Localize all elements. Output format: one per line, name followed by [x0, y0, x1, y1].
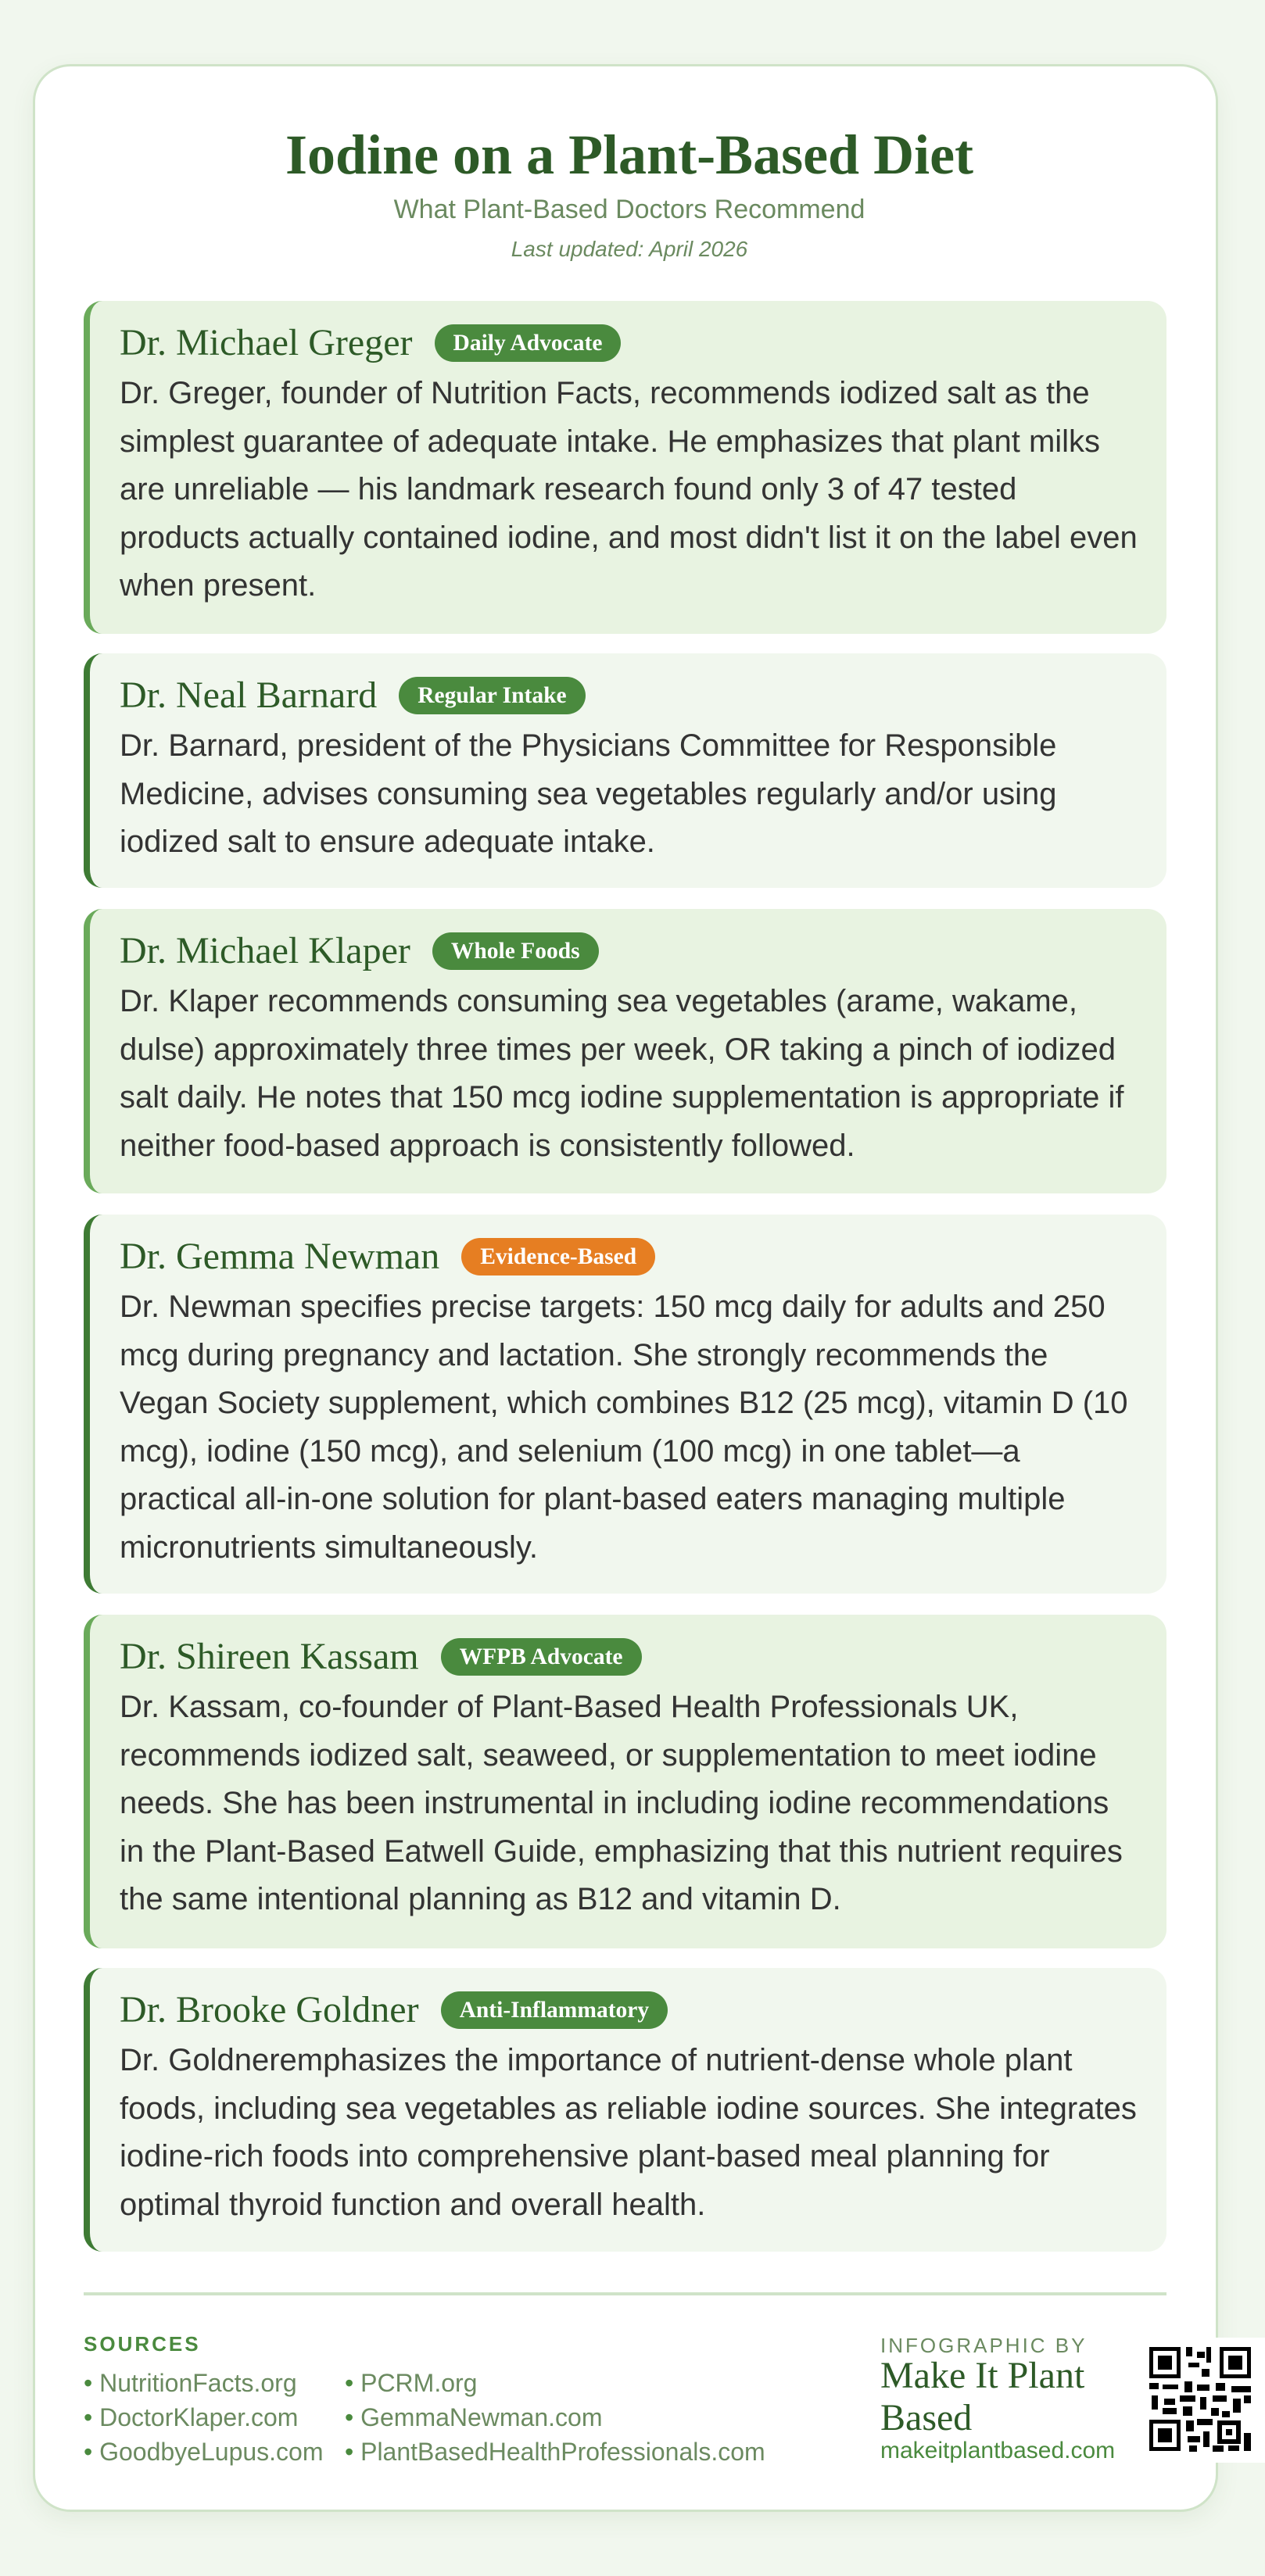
sources heading: SOURCES [84, 2332, 201, 2356]
name with badge: Daily Advocate [453, 331, 602, 356]
text: Dr. Goldneremphasizes the importance of nutrient-dense whole plant foods, including sea vegetables as reliable iodine sources. She integrates iodine-rich foods into comprehensive plant-based meal planning for optimal thyroid function and overall health. [120, 2043, 1137, 2221]
name with badge: Dr. Michael Klaper [120, 930, 410, 971]
sources column 1: • DoctorKlaper.com [84, 2403, 298, 2431]
name with badge: Dr. Gemma Newman [120, 1236, 439, 1277]
name with badge: WFPB Advocate [460, 1644, 623, 1669]
sources column 2: • PlantBasedHealthProfessionals.com [345, 2438, 765, 2466]
text: Dr. Kassam, co-founder of Plant-Based Health Professionals UK, recommends iodized salt, seaweed, or supplementation to meet iodine needs. She has been instrumental in including iodine recommendations in the Plant-Based Eatwell Guide, emphasizing that this nutrient requires the same intentional planning as B12 and vitamin D. [120, 1690, 1123, 1916]
name with badge [120, 1236, 655, 1277]
name with badge: Regular Intake [417, 683, 567, 708]
brand name: Make It Plant Based [880, 2355, 1084, 2438]
panel: Dr. Brooke Goldner [84, 1968, 1166, 2252]
brand url: makeitplantbased.com [880, 2438, 1115, 2463]
subtitle: What Plant-Based Doctors Recommend [394, 195, 865, 224]
name with badge [120, 930, 599, 971]
infographic by label: INFOGRAPHIC BY [880, 2334, 1087, 2357]
sources column 2 [345, 2369, 765, 2466]
name with badge [120, 322, 621, 363]
name with badge: Dr. Shireen Kassam [120, 1636, 419, 1677]
sources column 2: • GemmaNewman.com [345, 2403, 602, 2431]
name with badge: Dr. Brooke Goldner [120, 1989, 419, 2030]
text: Dr. Klaper recommends consuming sea vegetables (arame, wakame, dulse) approximately three times per week, OR taking a pinch of iodized salt daily. He notes that 150 mcg iodine supplementation is appropriate if neither food-based approach is consistently followed. [120, 984, 1123, 1163]
name with badge: Dr. Neal Barnard [120, 674, 377, 716]
name with badge [120, 1636, 642, 1677]
name with badge: Evidence-Based [480, 1244, 636, 1269]
panel: Dr. Neal Barnard [84, 653, 1166, 888]
sources column 1: • GoodbyeLupus.com [84, 2438, 324, 2466]
sources column 2: • PCRM.org [345, 2369, 477, 2397]
text: Dr. Barnard, president of the Physicians Committee for Responsible Medicine, advises consuming sea vegetables regularly and/or using iodized salt to ensure adequate intake. [120, 728, 1056, 859]
sources column 1 [84, 2369, 324, 2466]
panel: Dr. Shireen Kassam [84, 1615, 1166, 1948]
panel: Dr. Michael Klaper [84, 909, 1166, 1193]
last updated: Last updated: April 2026 [511, 237, 747, 261]
name with badge [120, 1989, 668, 2030]
sources column 1: • NutritionFacts.org [84, 2369, 297, 2397]
text: Dr. Greger, founder of Nutrition Facts, recommends iodized salt as the simplest guarantee of adequate intake. He emphasizes that plant milks are unreliable — his landmark research found only 3 of 47 tested products actually contained iodine, and most didn't list it on the label even when present. [120, 376, 1138, 603]
title: Iodine on a Plant-Based Diet [285, 123, 973, 186]
panel: Dr. Gemma Newman [84, 1215, 1166, 1594]
icon: QR code [1145, 2338, 1265, 2463]
name with badge: Dr. Michael Greger [120, 322, 413, 363]
name with badge: Anti-Inflammatory [460, 1998, 649, 2023]
text: Dr. Newman specifies precise targets: 150 mcg daily for adults and 250 mcg during pregnancy and lactation. She strongly recommends the Vegan Society supplement, which combines B12 (25 mcg), vitamin D (10 mcg), iodine (150 mcg), and selenium (100 mcg) in one tablet—a practical all-in-one solution for plant-based eaters managing multiple micronutrients simultaneously. [120, 1290, 1128, 1565]
name with badge: Whole Foods [451, 939, 580, 964]
name with badge [120, 674, 586, 716]
panel: Dr. Michael Greger [84, 301, 1166, 634]
